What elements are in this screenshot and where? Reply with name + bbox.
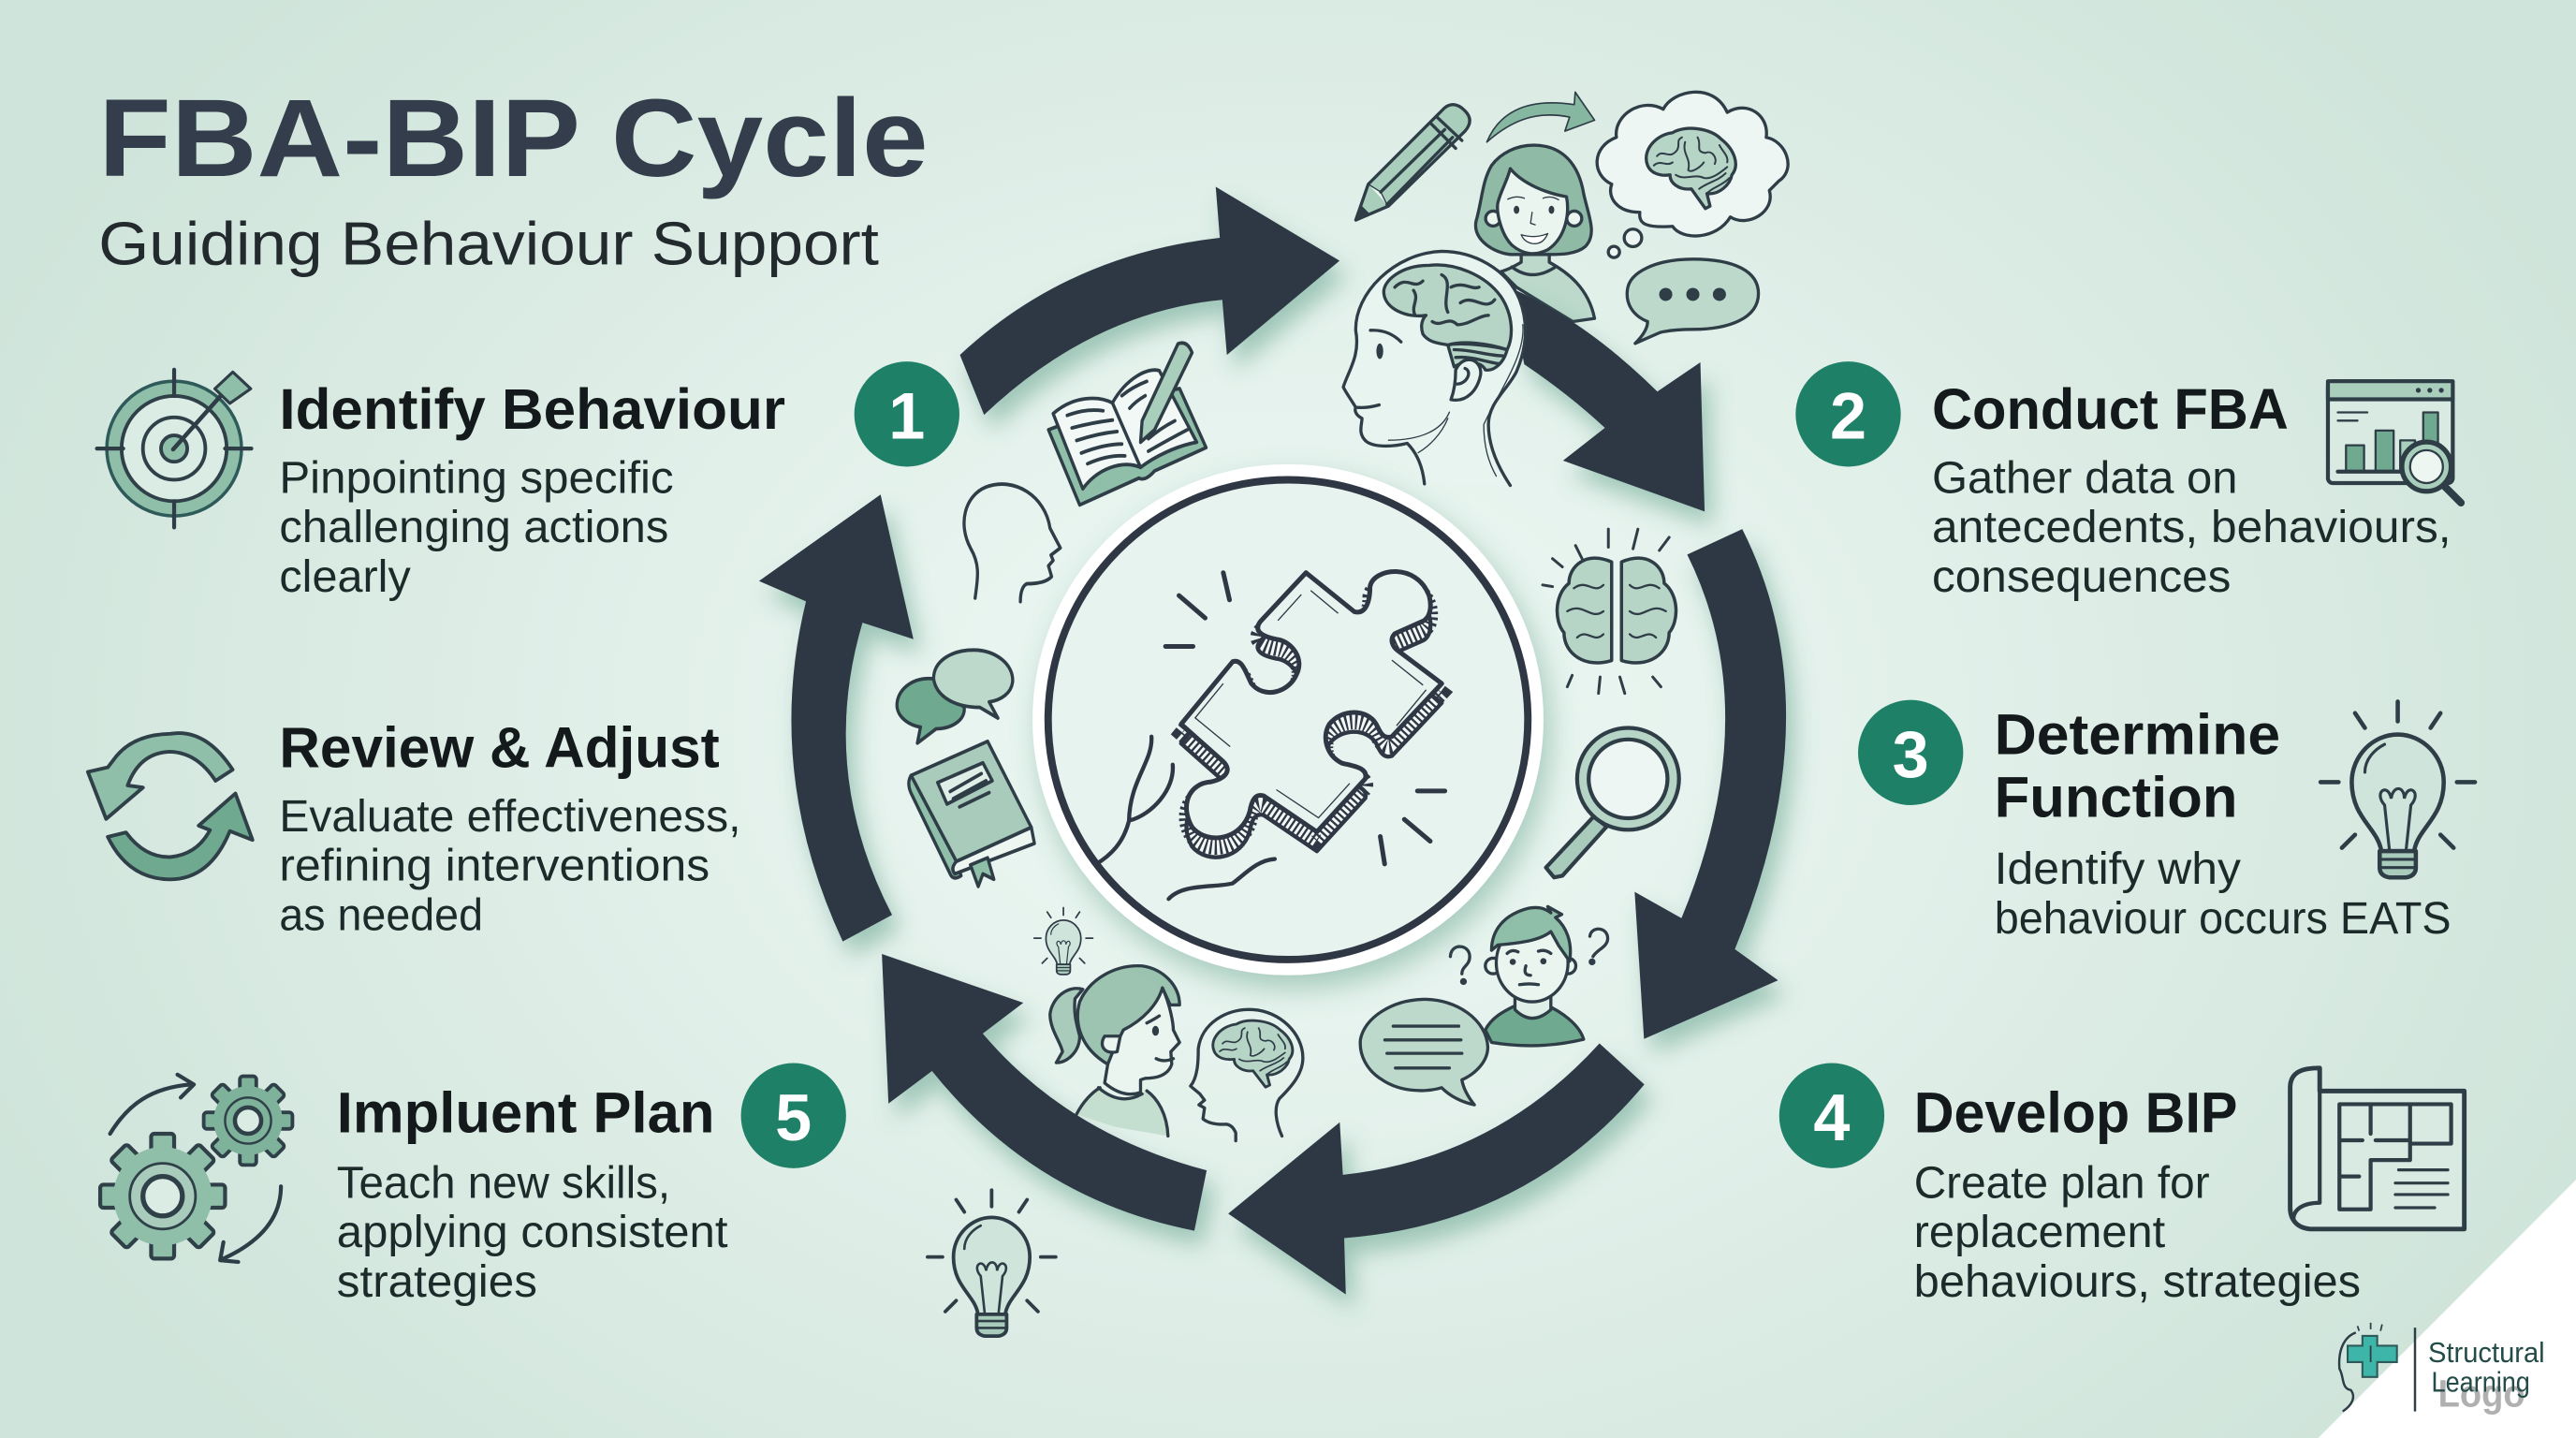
number badge 3: 3 (1893, 717, 1929, 791)
number badge 2: 2 (1830, 379, 1866, 453)
subtitle: Guiding Behaviour Support (98, 210, 879, 278)
icon: chart with magnifier (2328, 381, 2461, 503)
logo (2339, 1323, 2545, 1415)
heading: Function (1995, 765, 2237, 829)
logo: Logo (2438, 1372, 2525, 1415)
number badge 5: 5 (775, 1080, 812, 1154)
icon: gears (100, 1075, 292, 1262)
number badge 4 (1779, 1064, 1884, 1168)
description: as needed (279, 889, 483, 940)
puzzle piece (1181, 571, 1442, 858)
small head with brain (1191, 1009, 1303, 1140)
description: behaviours, strategies (1914, 1256, 2361, 1307)
thought cloud with brain (1597, 92, 1788, 257)
book icon (909, 741, 1034, 887)
number badge 5 (741, 1064, 846, 1168)
arrow 5 (882, 954, 1207, 1231)
number badge 1 (855, 361, 959, 466)
description: Create plan for (1914, 1157, 2210, 1208)
description: Pinpointing specific (279, 453, 674, 504)
description: Gather data on (1932, 453, 2237, 504)
number badge 4: 4 (1813, 1080, 1850, 1154)
title: FBA-BIP Cycle (98, 77, 929, 199)
description (1932, 453, 2452, 602)
description (337, 1157, 728, 1307)
logo: Learning (2432, 1366, 2530, 1399)
description: refining interventions (279, 841, 710, 891)
description: replacement (1914, 1207, 2166, 1257)
speech bubble dots (1627, 259, 1759, 344)
step 6: review and adjust (88, 716, 741, 940)
description: behaviour occurs EATS (1995, 893, 2452, 944)
description: clearly (279, 551, 412, 602)
logo: Structural (2428, 1336, 2545, 1369)
puzzle rays and vines (1095, 573, 1445, 899)
description: Evaluate effectiveness, (279, 791, 741, 842)
icon: lightbulb (2320, 701, 2475, 877)
brain icon right (1543, 529, 1676, 694)
small head outline (964, 484, 1061, 602)
heading: Impluent Plan (337, 1080, 714, 1145)
number badge 1: 1 (888, 379, 925, 453)
step 2: conduct FBA (1795, 361, 2461, 602)
small lightbulb (1034, 907, 1092, 975)
step 3: determine function (1858, 700, 2475, 944)
heading: Identify Behaviour (279, 377, 785, 442)
pencil icon (1355, 105, 1470, 220)
magnifier icon (1546, 728, 1679, 877)
icon: blueprint (2291, 1068, 2465, 1229)
description (1914, 1157, 2361, 1307)
arrow 4 (1228, 1043, 1645, 1295)
girl with ponytail (1050, 966, 1179, 1136)
icon: target (97, 370, 252, 527)
description: challenging actions (279, 502, 668, 552)
number badge 2 (1795, 361, 1901, 466)
speech bubble with lines (1360, 999, 1487, 1105)
description: Identify why (1995, 844, 2242, 894)
description (1995, 844, 2452, 944)
number badge 3 (1858, 700, 1963, 805)
description (279, 453, 674, 602)
description: applying consistent (337, 1207, 728, 1257)
central circle (1032, 464, 1544, 976)
open book icon (1048, 343, 1207, 505)
heading: Conduct FBA (1932, 377, 2289, 442)
description: antecedents, behaviours, (1932, 502, 2452, 552)
cycle arrows (759, 187, 1786, 1295)
arrow 1 (960, 187, 1339, 415)
heading: Develop BIP (1914, 1080, 2237, 1145)
speech bubbles left (897, 650, 1013, 743)
heading (1995, 703, 2280, 829)
description: strategies (337, 1256, 537, 1307)
arrow 2 (1509, 287, 1705, 511)
step 1: identify behaviour (97, 361, 959, 602)
heading: Determine (1995, 703, 2280, 768)
woman with shirt (1475, 145, 1595, 321)
curved arrow icon (1486, 92, 1595, 142)
icon: review arrows (88, 733, 253, 879)
heading: Review & Adjust (279, 716, 720, 781)
description: consequences (1932, 551, 2231, 602)
boy with question marks (1450, 906, 1608, 1046)
description (279, 791, 741, 940)
lightbulb bottom (928, 1190, 1056, 1336)
description: Teach new skills, (337, 1157, 670, 1208)
arrow 6 (759, 494, 914, 942)
head with brain (top) (1343, 251, 1526, 486)
white corner (2318, 1180, 2576, 1438)
arrow 3 (1634, 529, 1786, 1039)
step 5: implement plan (100, 1064, 846, 1307)
step 4: develop BIP (1779, 1064, 2465, 1307)
